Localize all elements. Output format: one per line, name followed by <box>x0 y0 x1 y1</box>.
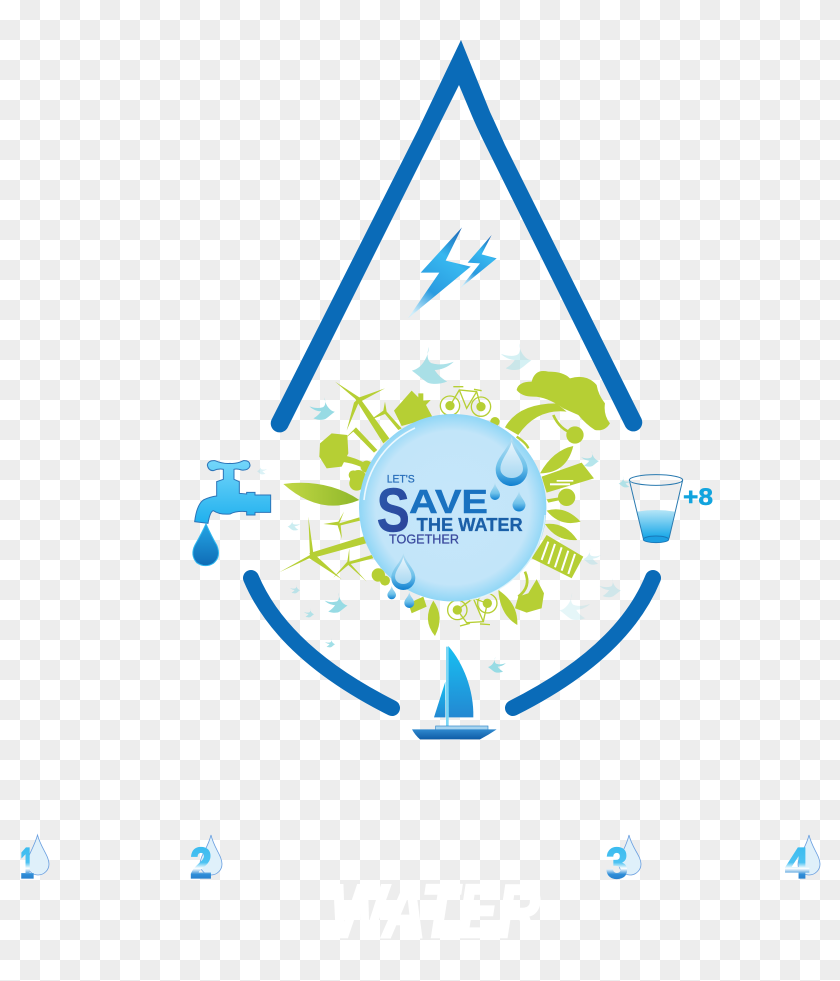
numbered drop 4 <box>785 835 820 888</box>
numbered drop 1: 1 <box>20 839 34 888</box>
bicycle top <box>440 387 491 416</box>
globe text: the water: THE WATER <box>417 515 523 535</box>
water droplet tiny lower right <box>404 592 414 608</box>
numbered drop 4: 4 <box>785 839 810 888</box>
globe text: AVE: AVE <box>409 483 488 520</box>
water droplet small upper left <box>490 483 500 500</box>
windmill upper left <box>335 382 402 453</box>
water droplet tiny lower left <box>387 586 396 599</box>
building right lower with stripes <box>532 535 583 578</box>
illustration: green eco planet silhouettes <box>279 371 610 636</box>
right leaves <box>540 446 581 540</box>
small tree right <box>547 489 575 506</box>
bicycle bottom <box>448 594 497 626</box>
icon: glass of water <box>629 475 683 543</box>
plant and house lower left <box>372 568 427 613</box>
water droplet large upper <box>496 437 528 486</box>
globe text: let's: LET'S <box>387 474 415 486</box>
water drop outline: lower right arc <box>513 578 653 708</box>
birds flock <box>257 343 631 673</box>
big left leaf <box>283 483 359 506</box>
building right upper <box>542 463 594 493</box>
windmill small left <box>323 512 360 539</box>
plant beside globe left <box>349 470 364 491</box>
globe: water sphere <box>359 414 546 601</box>
house <box>394 391 433 426</box>
bottom leaves <box>428 590 517 636</box>
water drop outline: upper peak <box>271 40 642 432</box>
numbered drop 2: 2 <box>190 839 212 888</box>
icon: water tap <box>193 461 271 566</box>
tree left <box>319 433 373 487</box>
icon: sailboat <box>412 646 497 739</box>
water drop outline: lower left arc <box>251 578 392 708</box>
globe text: together: TOGETHER <box>389 532 459 546</box>
icon: lightning bolts <box>408 227 497 318</box>
building windows <box>550 480 573 485</box>
tree top right <box>490 371 610 448</box>
water droplet small upper right <box>512 491 526 512</box>
globe text: S: S <box>377 476 410 546</box>
label: plus eight glasses: +8 <box>683 484 713 511</box>
title: WATER in white: WATER <box>330 869 540 953</box>
numbered drop 3: 3 <box>606 839 628 888</box>
water droplet large lower <box>391 553 415 590</box>
windmill lower left large <box>279 517 366 579</box>
windmill lower <box>333 548 373 582</box>
tree bottom right <box>515 572 544 613</box>
numbered drop 3 <box>606 835 641 888</box>
